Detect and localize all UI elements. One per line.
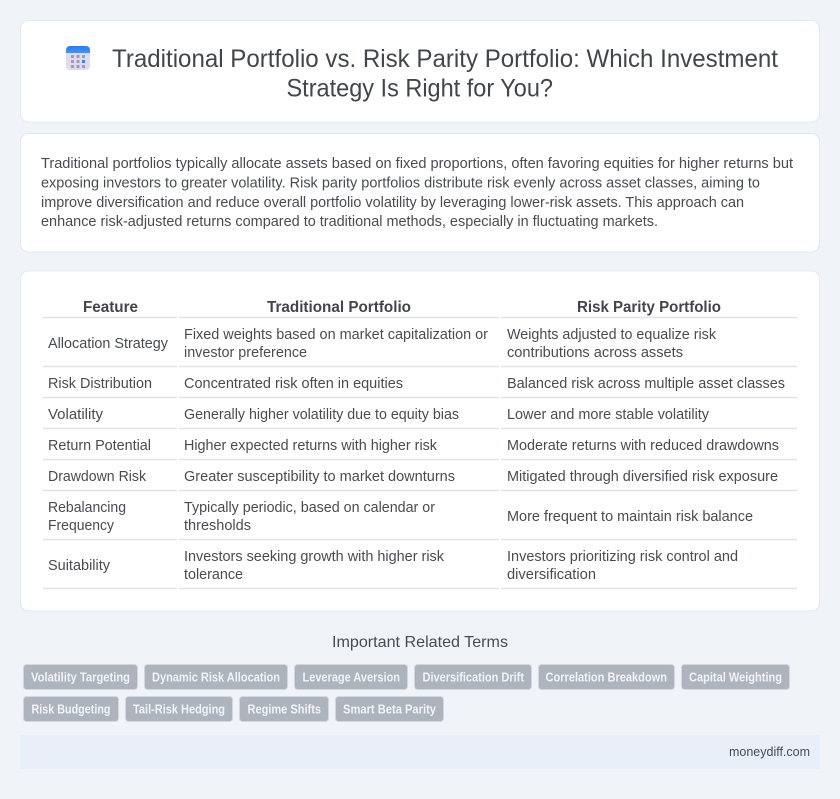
title [112,45,778,102]
footer [20,735,820,769]
tag: Regime Shifts [240,696,328,722]
row: return potential: Higher expected returns with higher risk [184,438,438,454]
row: drawdown risk: Drawdown Risk [48,469,147,485]
text block: intro: improve diversification and reduce overall portfolio volatility by leveraging lower-risk assets. This approach can [41,195,744,211]
icon: calendar [66,46,90,70]
row: volatility [48,407,710,423]
row: risk distribution: Risk Distribution [48,376,152,392]
table header row: Feature [83,299,138,316]
table header row: Traditional Portfolio [267,299,411,316]
row: drawdown risk: Mitigated through diversified risk exposure [507,469,778,485]
table header row: Risk Parity Portfolio [577,299,721,316]
row: risk distribution: Balanced risk across multiple asset classes [507,376,785,392]
related term tags [24,664,790,722]
row: rebalancing frequency: Frequency [48,518,115,534]
row: suitability: Investors seeking growth with higher risk [184,549,445,565]
tag: Leverage Aversion [294,664,408,690]
tag: Dynamic Risk Allocation: Dynamic Risk Allocation [152,670,280,684]
row: drawdown risk [48,469,778,485]
title: Traditional Portfolio vs. Risk Parity Portfolio: Which Investment [112,45,778,73]
title: Strategy Is Right for You? [286,74,553,102]
tag: Risk Budgeting: Risk Budgeting [32,702,110,716]
row: drawdown risk: Greater susceptibility to market downturns [184,469,455,485]
heading: related terms: Important Related Terms [332,634,508,651]
tag: Dynamic Risk Allocation [144,664,288,690]
row: suitability [48,549,738,583]
tag: Volatility Targeting: Volatility Targeting [31,670,130,684]
tag: Diversification Drift: Diversification Drift [422,670,525,684]
row: allocation strategy: Fixed weights based on market capitalization or [184,327,488,343]
row: allocation strategy [48,327,717,361]
tag: Diversification Drift [414,664,532,690]
table header row [83,299,721,316]
row: allocation strategy: contributions across assets [507,345,683,361]
tag: Smart Beta Parity [336,696,444,722]
row: risk distribution [48,376,785,392]
row: rebalancing frequency [48,500,753,534]
row: return potential [48,438,779,454]
text block: intro [41,156,793,230]
tag: Correlation Breakdown: Correlation Breakdown [546,670,667,684]
row: risk distribution: Concentrated risk often in equities [184,376,403,392]
row: allocation strategy: Allocation Strategy [48,336,169,352]
row: volatility: Volatility [48,407,104,423]
tag: Regime Shifts: Regime Shifts [248,702,321,716]
row: rebalancing frequency: Rebalancing [48,500,126,516]
row: suitability: Suitability [48,558,111,574]
tag: Volatility Targeting [24,664,138,690]
panel: title header [20,20,820,122]
tag: Leverage Aversion: Leverage Aversion [302,670,400,684]
tag: Capital Weighting: Capital Weighting [689,670,782,684]
row: suitability: diversification [507,567,596,583]
row: suitability: tolerance [184,567,243,583]
row: allocation strategy: investor preference [184,345,307,361]
text block: intro: exposing investors to greater volatility. Risk parity portfolios distribute risk evenly across asset classes, aiming to [41,176,760,192]
panel: intro paragraph [20,134,820,252]
tag: Tail-Risk Hedging: Tail-Risk Hedging [133,702,225,716]
text block: intro: Traditional portfolios typically allocate assets based on fixed proportions, often favoring equities for higher returns but [41,156,793,172]
tag: Capital Weighting [682,664,790,690]
row: return potential: Return Potential [48,438,151,454]
tag: Tail-Risk Hedging [126,696,232,722]
row: rebalancing frequency: Typically periodic, based on calendar or [184,500,435,516]
row: return potential: Moderate returns with reduced drawdowns [507,438,779,454]
panel: comparison table [20,271,820,611]
row: volatility: Lower and more stable volatility [507,407,710,423]
row: rebalancing frequency: More frequent to maintain risk balance [507,509,753,525]
footer: moneydiff.com [729,744,810,759]
tag: Smart Beta Parity: Smart Beta Parity [343,702,437,716]
tag: Correlation Breakdown [538,664,674,690]
row: rebalancing frequency: thresholds [184,518,251,534]
row: volatility: Generally higher volatility due to equity bias [184,407,459,423]
row: suitability: Investors prioritizing risk control and [507,549,738,565]
tag: Risk Budgeting [24,696,118,722]
text block: intro: enhance risk-adjusted returns compared to traditional methods, especially in fluctuating markets. [41,214,658,230]
row: allocation strategy: Weights adjusted to equalize risk [507,327,717,343]
